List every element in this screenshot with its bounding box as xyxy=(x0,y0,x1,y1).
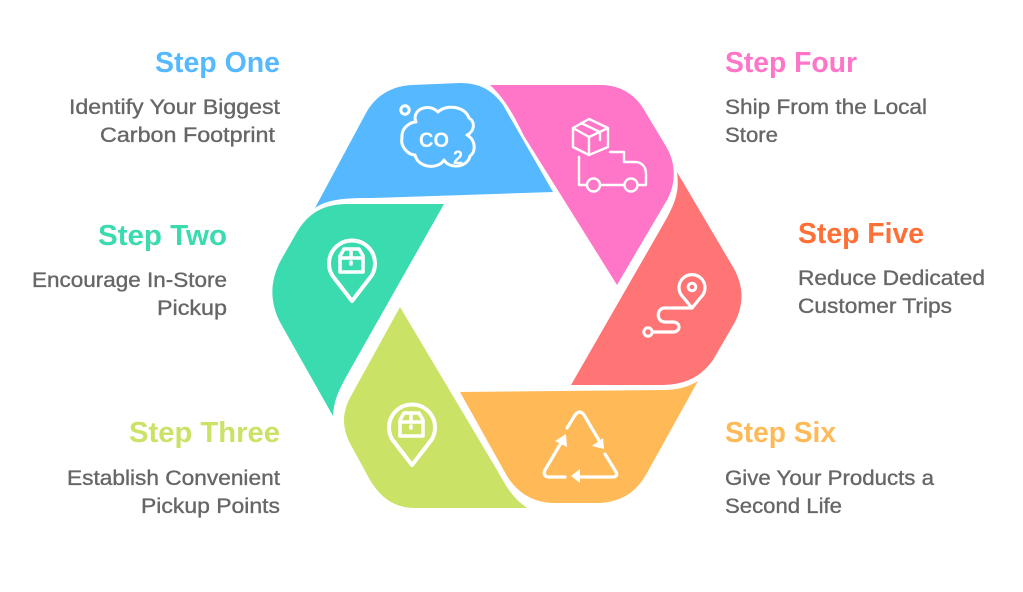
text block: step five: Customer Trips xyxy=(798,295,952,318)
text block: step two: Encourage In-Store xyxy=(32,269,227,292)
text block: step one: Identify Your Biggest xyxy=(69,96,280,119)
icon: co2 cloud: 2 xyxy=(453,148,463,169)
icon: recycling triangle xyxy=(544,412,617,483)
segment: step three yellow-green xyxy=(344,307,527,508)
segment: step five red xyxy=(571,172,742,385)
text block: step four xyxy=(725,47,927,147)
text block: step three xyxy=(67,417,280,518)
text block: step six: Step Six xyxy=(725,417,836,449)
text block: step four: Store xyxy=(725,124,778,147)
icon: co2 cloud xyxy=(401,106,474,169)
text block: step three: Pickup Points xyxy=(141,495,280,518)
text block: step five: Reduce Dedicated xyxy=(798,267,985,290)
text block: step three: Establish Convenient xyxy=(67,467,280,490)
icon: route with pin xyxy=(644,275,705,336)
text block: step five: Step Five xyxy=(798,218,924,250)
segment: step six orange xyxy=(460,381,698,503)
icon: store pickup pin green xyxy=(329,241,375,301)
text block: step six xyxy=(725,417,934,518)
text block: step six: Second Life xyxy=(725,495,842,518)
segment: step four pink xyxy=(490,85,674,285)
text block: step five xyxy=(798,218,985,318)
segment: step two green xyxy=(272,204,444,416)
text block: step one: Carbon Footprint xyxy=(100,124,275,147)
icon: box and delivery truck xyxy=(573,119,646,192)
text block: step two: Step Two xyxy=(98,220,227,252)
text block: step two xyxy=(32,220,227,320)
icon: co2 cloud: CO xyxy=(419,129,449,152)
text block: step six: Give Your Products a xyxy=(725,467,934,490)
text block: step three: Step Three xyxy=(129,417,280,449)
text block: step four: Step Four xyxy=(725,47,857,79)
text block: step two: Pickup xyxy=(157,297,227,320)
text block: step one: Step One xyxy=(155,47,280,79)
text block: step one xyxy=(69,47,280,147)
icon: store pickup pin yellow-green xyxy=(389,405,435,465)
text block: step four: Ship From the Local xyxy=(725,96,927,119)
segment: step one blue xyxy=(315,83,553,208)
